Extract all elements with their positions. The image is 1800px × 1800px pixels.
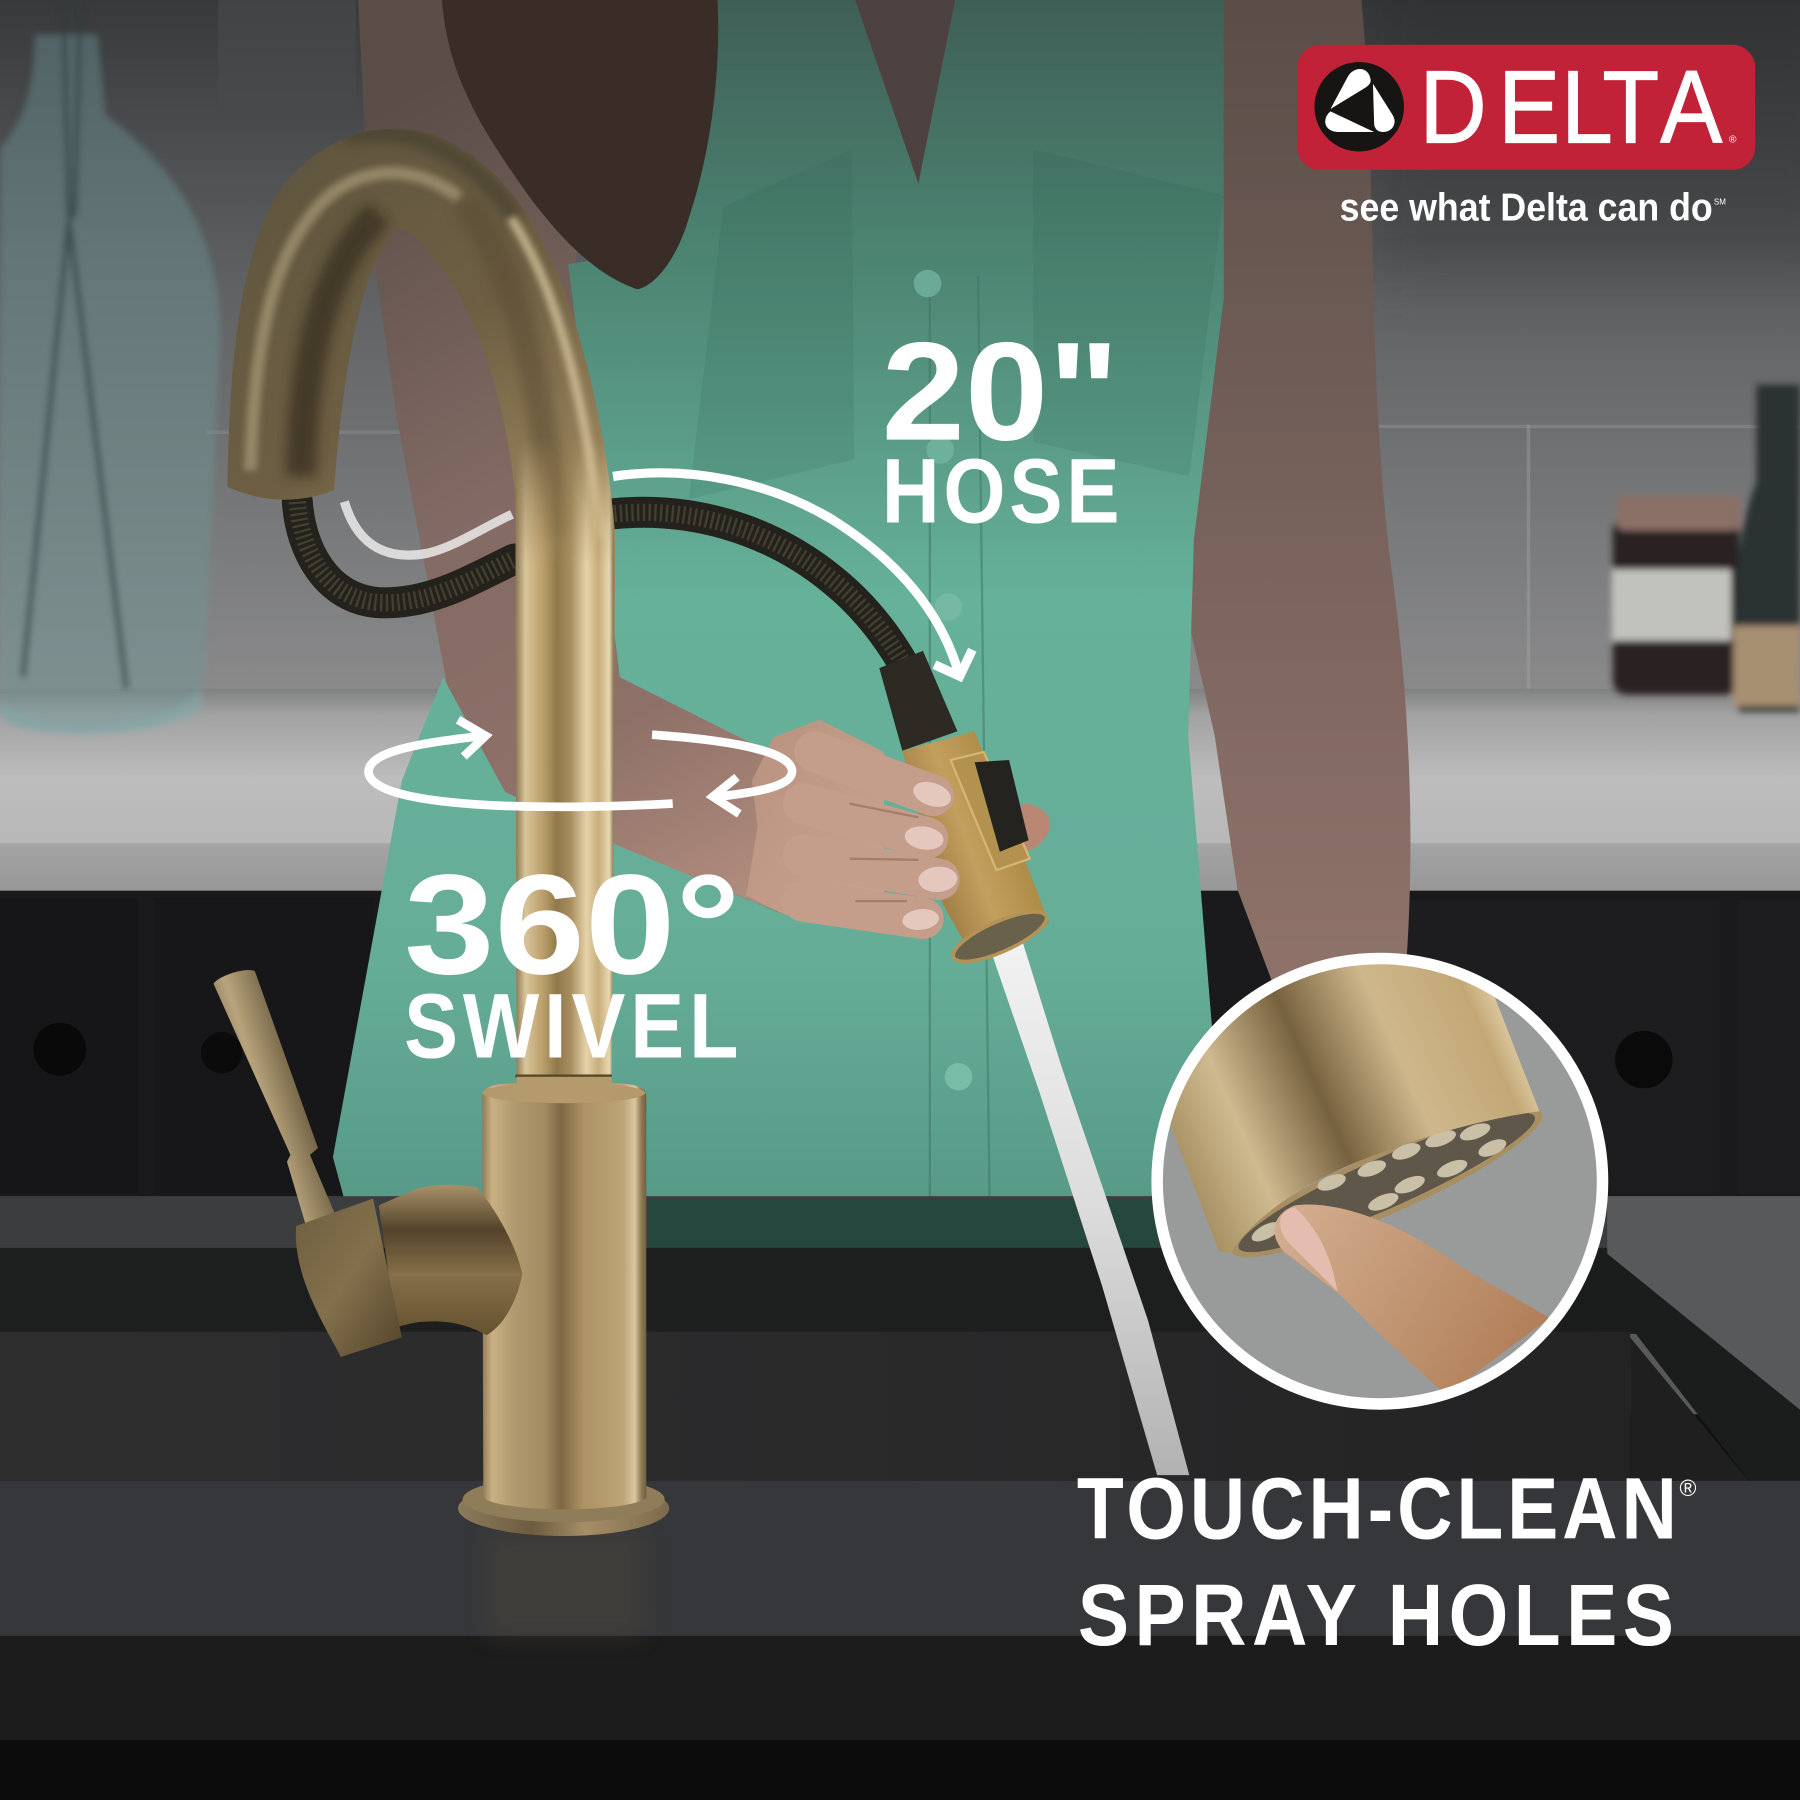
inset circle: touch-clean spray holes bbox=[1142, 941, 1604, 1405]
kitchen background: wall, backsplash and shelves bbox=[0, 0, 1800, 712]
label: touch-clean spray holes: SPRAY HOLES bbox=[1078, 1568, 1674, 1664]
person: teal shirt bbox=[333, 0, 1226, 1200]
Delta logo: see what Delta can do bbox=[1340, 186, 1713, 229]
Delta logo: DELTA bbox=[1420, 49, 1723, 164]
lower cabinets bbox=[0, 891, 1800, 1198]
hose guide arrow, rear section bbox=[344, 502, 512, 555]
label: touch-clean spray holes: TOUCH-CLEAN bbox=[1077, 1461, 1677, 1557]
label: touch-clean spray holes: ® bbox=[1679, 1475, 1696, 1501]
label: 20 inch hose bbox=[882, 313, 1120, 543]
label: 360 degree swivel: 360° bbox=[404, 845, 740, 1004]
hose guide arrow, front section bbox=[613, 473, 972, 676]
logo emblem bbox=[1314, 62, 1404, 152]
pull-down spray head bbox=[879, 651, 1052, 971]
swivel arrows bbox=[368, 720, 792, 814]
label: 360 degree swivel bbox=[404, 845, 740, 1077]
faucet: lever handle and hub bbox=[214, 970, 522, 1357]
braided hose bbox=[297, 502, 901, 660]
label: 20 inch hose: HOSE bbox=[882, 440, 1120, 543]
Delta logo: SM bbox=[1714, 197, 1726, 206]
water stream bbox=[990, 939, 1189, 1475]
person: arms bbox=[358, 0, 1410, 987]
label: 360 degree swivel: SWIVEL bbox=[404, 976, 738, 1077]
hand fingers bbox=[746, 720, 958, 932]
back counter bbox=[0, 689, 1800, 891]
hand holding the spray head, part behind bbox=[1022, 804, 1050, 852]
Delta logo: ® bbox=[1729, 134, 1737, 145]
hair bbox=[442, 0, 718, 289]
label: 20 inch hose: 20" bbox=[882, 313, 1119, 470]
Delta logo bbox=[1297, 45, 1755, 229]
faucet: base cylinder bbox=[458, 1077, 669, 1536]
jars and bottle on the right bbox=[1612, 385, 1800, 712]
glass vase on the left bbox=[0, 0, 220, 734]
sink and dark counter bbox=[0, 1196, 1800, 1800]
faucet: gooseneck spout bbox=[227, 129, 615, 1081]
label: touch-clean spray holes bbox=[1077, 1461, 1696, 1664]
